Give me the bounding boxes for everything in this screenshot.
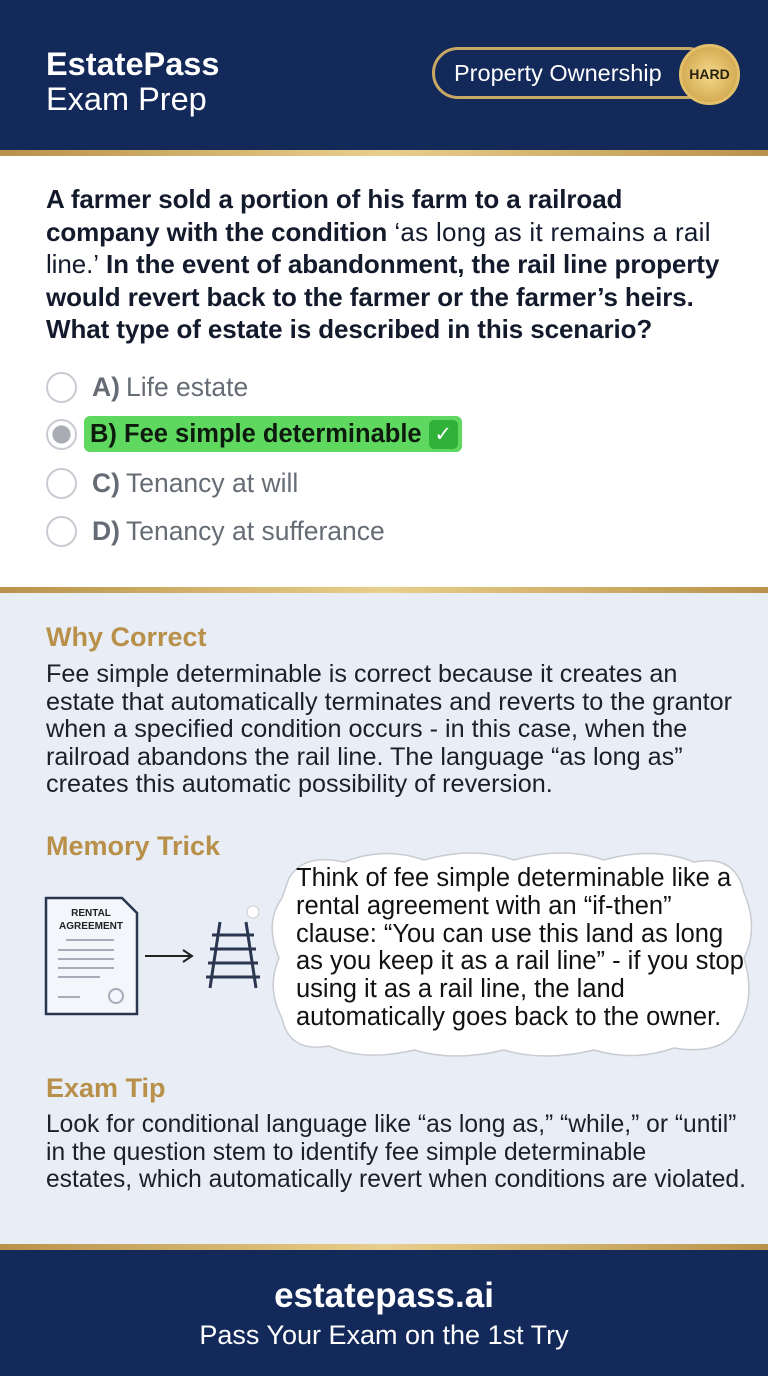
question panel — [0, 156, 768, 588]
option C — [46, 468, 298, 499]
exam tip text: estates, which automatically revert when conditions are violated. — [46, 1166, 746, 1193]
difficulty seal: HARD — [689, 66, 730, 82]
icon: rental agreement: AGREEMENT — [59, 921, 123, 932]
heading: exam tip: Exam Tip — [46, 1073, 166, 1103]
header — [0, 0, 768, 150]
icon: rental agreement — [44, 896, 138, 1016]
category badge — [432, 47, 714, 99]
memory trick text: automatically goes back to the owner. — [296, 1003, 721, 1031]
option C: Tenancy at will — [126, 468, 298, 498]
option D: D) — [92, 516, 120, 546]
category badge: Property Ownership — [454, 60, 662, 86]
memory trick text: Think of fee simple determinable like a — [296, 864, 731, 892]
exam tip text: Look for conditional language like “as long as,” “while,” or “until” — [46, 1111, 736, 1138]
option B correct: ✓ — [434, 422, 452, 446]
tagline: Pass Your Exam on the 1st Try — [199, 1320, 569, 1350]
option A: A) — [92, 372, 120, 402]
heading: memory trick: Memory Trick — [46, 831, 220, 861]
question text: would revert back to the farmer or the farmer’s heirs. — [46, 282, 694, 312]
option B correct — [46, 416, 462, 452]
question text — [46, 184, 720, 344]
footer url: estatepass.ai — [274, 1276, 494, 1315]
question text: What type of estate is described in this scenario? — [46, 314, 652, 344]
why correct text: estate that automatically terminates and reverts to the grantor — [46, 688, 732, 716]
memory trick text: as you keep it as a rail line” - if you stop — [296, 947, 744, 975]
question text: A farmer sold a portion of his farm to a railroad — [46, 184, 622, 214]
footer — [0, 1250, 768, 1376]
why correct text: when a specified condition occurs - in this case, when the — [46, 715, 687, 743]
memory trick text: using it as a rail line, the land — [296, 975, 625, 1003]
question text: line.’ In the event of abandonment, the rail line property — [46, 249, 719, 279]
why correct text — [46, 660, 732, 798]
why correct text: railroad abandons the rail line. The language “as long as” — [46, 743, 683, 771]
memory trick text: rental agreement with an “if-then” — [296, 892, 672, 920]
icon: rental agreement: RENTAL — [71, 908, 111, 919]
brand: Exam Prep — [46, 81, 207, 117]
option D: Tenancy at sufferance — [126, 516, 385, 546]
heading: why correct: Why Correct — [46, 622, 207, 652]
question text: company with the condition ‘as long as it remains a rail — [46, 216, 711, 246]
option A — [46, 372, 248, 403]
memory trick text: clause: “You can use this land as long — [296, 920, 723, 948]
option A: Life estate — [126, 372, 248, 402]
brand: EstatePass — [46, 46, 219, 82]
icon: rail track — [206, 922, 260, 988]
exam tip text — [46, 1111, 746, 1193]
exam tip text: in the question stem to identify fee simple determinable — [46, 1139, 646, 1166]
brand — [46, 46, 219, 117]
option C: C) — [92, 468, 120, 498]
option B correct: B) Fee simple determinable — [90, 420, 422, 448]
difficulty seal — [679, 44, 740, 105]
why correct text: creates this automatic possibility of reversion. — [46, 770, 553, 798]
thought bubble — [246, 852, 752, 1057]
arrow — [145, 949, 194, 963]
why correct text: Fee simple determinable is correct because it creates an — [46, 660, 677, 688]
memory trick text — [296, 864, 744, 1031]
